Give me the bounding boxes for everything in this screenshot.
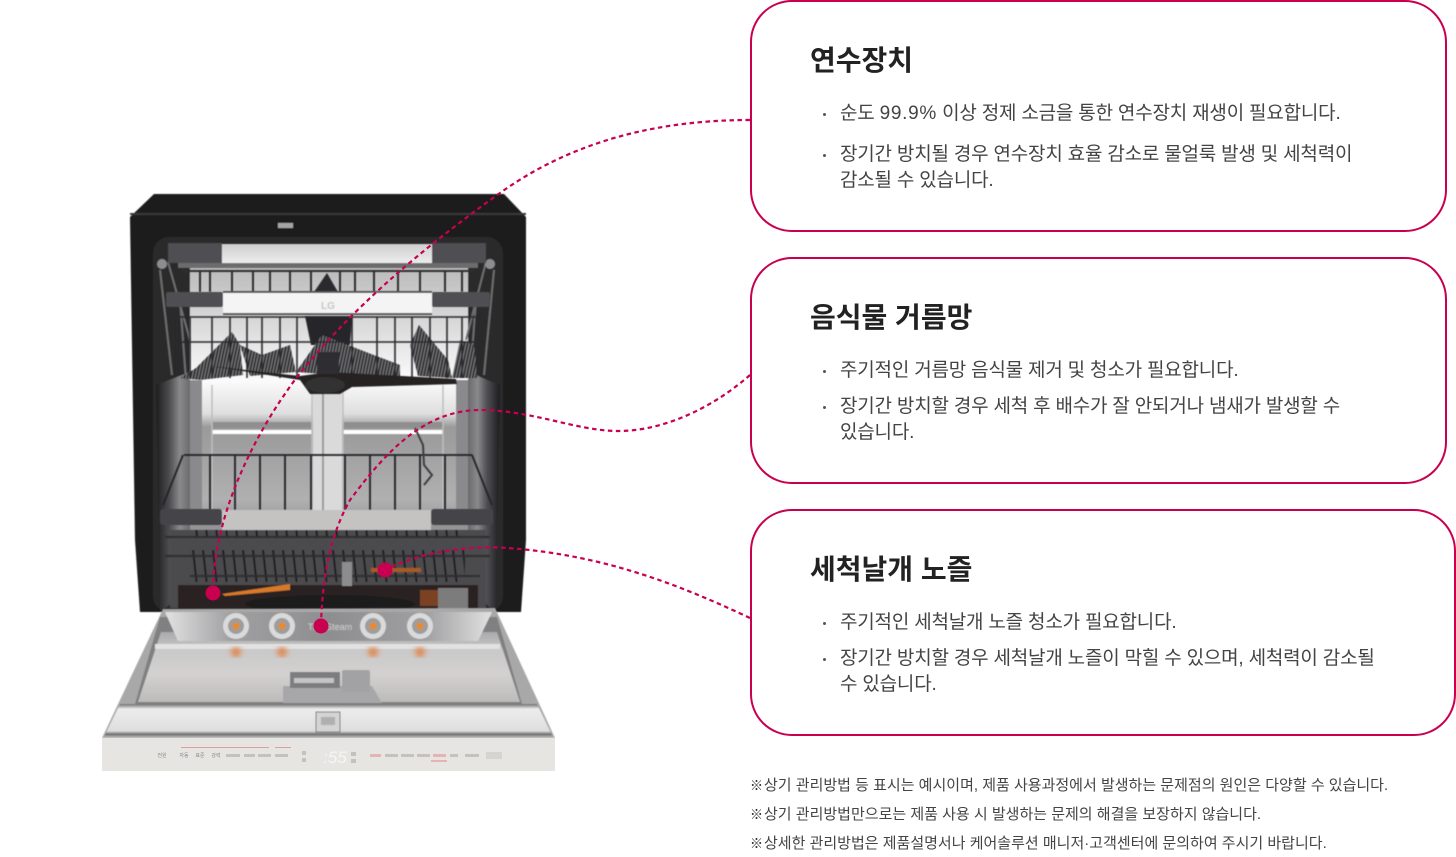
open door	[102, 608, 555, 738]
rack-side mechanism	[160, 262, 494, 380]
control panel: 자동	[179, 752, 189, 759]
marker: food filter	[314, 618, 328, 634]
panel: food filter	[750, 257, 1447, 484]
lower rack	[160, 428, 493, 613]
control panel: 시작	[489, 752, 499, 759]
control panel	[102, 738, 555, 771]
connector: spray arm nozzle	[385, 547, 750, 618]
control panel: 전원	[157, 752, 167, 759]
upper rack	[166, 291, 490, 394]
heading: 세척날개 노즐	[810, 554, 972, 585]
panel: water softener	[750, 0, 1447, 232]
door liner	[138, 632, 520, 702]
nozzles	[223, 613, 433, 639]
text: second point	[840, 142, 1352, 194]
text: second point: 감소될 수 있습니다.	[840, 170, 993, 191]
display digits: :55	[323, 748, 347, 767]
TrueSteam text: TrueSteam	[308, 622, 352, 632]
LG logo text: LG	[321, 301, 335, 312]
connector: water softener	[213, 120, 750, 593]
text: second point: 수 있습니다.	[840, 674, 937, 695]
text: second point	[840, 646, 1375, 698]
control panel: 표준	[195, 753, 205, 759]
heading: 음식물 거름망	[810, 302, 972, 333]
spray arm	[210, 366, 457, 394]
panel: spray arm nozzle	[750, 509, 1456, 736]
text: second point	[840, 394, 1340, 446]
tub interior	[153, 237, 503, 612]
nozzle band	[165, 612, 492, 641]
text: second point: 장기간 방치할 경우 세척 후 배수가 잘 안되거나 냄새가 발생할 수	[840, 396, 1340, 417]
marker: spray arm nozzle	[378, 562, 392, 578]
nozzle reflections	[231, 647, 425, 657]
heading: 연수장치	[810, 45, 913, 76]
back wall ribs	[313, 390, 342, 520]
connector: food filter	[321, 375, 750, 626]
tine fans	[180, 332, 243, 380]
text: first point: 주기적인 거름망 음식물 제거 및 청소가 필요합니다.	[840, 360, 1238, 381]
control panel: 강력	[211, 752, 221, 759]
footnote 1: 상기 관리방법 등 표시는 예시이며, 제품 사용과정에서 발생하는 문제점의 원인은 다양할 수 있습니다.	[764, 777, 1388, 794]
footnote 2: 상기 관리방법만으로는 제품 사용 시 발생하는 문제의 해결을 보장하지 않습니다.	[764, 806, 1261, 823]
footnote 2: ※	[750, 807, 763, 822]
footnote 3: 상세한 관리방법은 제품설명서나 케어솔루션 매니저·고객센터에 문의하여 주시기 바랍니다.	[764, 835, 1327, 852]
dark tub floor	[178, 585, 478, 610]
text: first point: 순도 99.9% 이상 정제 소금을 통한 연수장치 재생이 필요합니다.	[840, 103, 1341, 124]
text: first point: 주기적인 세척날개 노즐 청소가 필요합니다.	[840, 612, 1176, 633]
door rim	[104, 704, 553, 737]
detergent dispenser	[283, 686, 382, 703]
footnote 3: ※	[750, 836, 763, 851]
upper spray rail	[168, 243, 486, 292]
marker: water softener	[206, 586, 220, 600]
footnote 1: ※	[750, 778, 763, 793]
text: second point: 있습니다.	[840, 422, 914, 443]
text: second point: 장기간 방치할 경우 세척날개 노즐이 막힐 수 있으며, 세척력이 감소될	[840, 648, 1375, 669]
dishwasher body	[130, 194, 526, 612]
text: second point: 장기간 방치될 경우 연수장치 효율 감소로 물얼룩 발생 및 세척력이	[840, 144, 1352, 165]
